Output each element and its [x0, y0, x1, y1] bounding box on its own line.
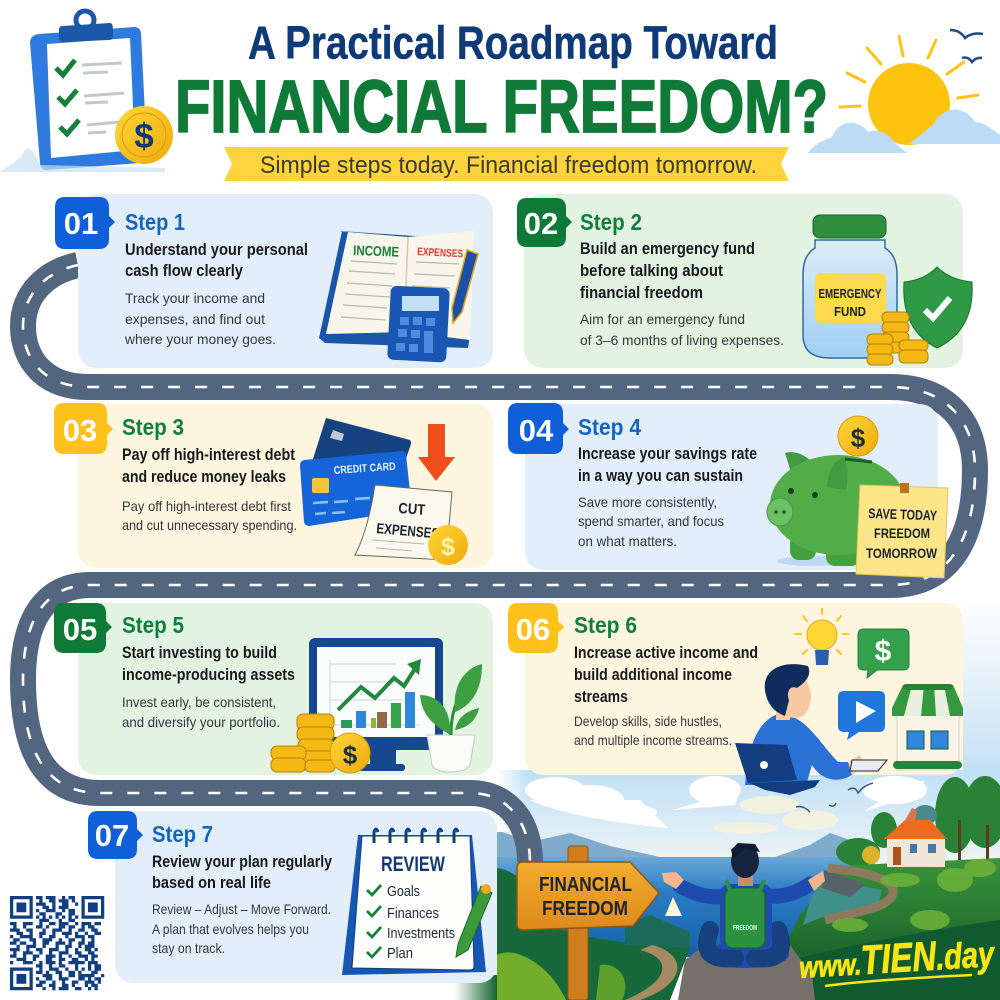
step 2 text	[580, 209, 784, 348]
icon: storefront	[891, 684, 963, 770]
winding road	[23, 265, 975, 862]
badge 04: 04	[519, 413, 554, 448]
icon: green piggy bank: $	[851, 423, 866, 453]
badge 03: 03	[63, 413, 97, 448]
step 2 text: Aim for an emergency fund	[580, 311, 745, 327]
step 5 text: Start investing to build	[122, 644, 277, 662]
step 4 text: in a way you can sustain	[578, 467, 743, 485]
step 1 text: cash flow clearly	[125, 262, 244, 280]
title	[175, 16, 828, 148]
person on rock with backpack: FREEDOM	[733, 923, 757, 932]
icon: credit cards: CREDIT CARD	[333, 461, 396, 477]
icon: plant in pot	[420, 664, 482, 772]
panel: step 2	[517, 194, 972, 368]
step 3 text: and reduce money leaks	[122, 468, 286, 486]
icon: green dollar speech bubble	[858, 629, 909, 678]
icon: ledger, calculator and pen: INCOME	[353, 242, 399, 260]
icon: review notepad: REVIEW	[381, 853, 445, 876]
step 3 text: Pay off high-interest debt	[122, 446, 295, 464]
panel: step 5	[54, 603, 493, 775]
icon: sticky note: TOMORROW	[866, 545, 938, 561]
icon: sun, clouds and birds	[808, 30, 1000, 153]
icon: sticky note	[856, 483, 948, 578]
badge 05	[54, 603, 112, 653]
sea	[497, 857, 867, 957]
step 4 text: Save more consistently,	[578, 494, 717, 510]
badge 01	[55, 197, 115, 249]
step 5 text: Invest early, be consistent,	[122, 694, 276, 710]
icon: emergency fund jar	[803, 215, 897, 358]
step 1 text: Step 1	[125, 209, 185, 235]
panel: step 1	[55, 194, 493, 368]
title: A Practical Roadmap Toward	[248, 16, 778, 68]
icon: coin stacks	[867, 312, 928, 365]
step 1 text: Understand your personal	[125, 241, 308, 259]
clouds in sky	[525, 776, 927, 828]
icon: cut expenses note and coin: CUT	[398, 500, 426, 519]
step 6 text: Increase active income and	[574, 644, 758, 662]
QR code	[10, 898, 104, 989]
icon: blue video speech bubble	[838, 691, 885, 740]
step 4 text: Step 4	[578, 414, 641, 440]
step 4 text: spend smarter, and focus	[578, 513, 724, 529]
icon: emergency fund jar: FUND	[834, 305, 866, 319]
icon: monitor with growth chart	[309, 638, 443, 771]
icon: review notepad	[342, 829, 492, 975]
step 3 text	[122, 414, 297, 533]
icon: ledger, calculator and pen: EXPENSES	[417, 246, 463, 260]
sailboat	[665, 897, 682, 916]
step 1 text: expenses, and find out	[125, 311, 265, 327]
step 6 text	[574, 612, 758, 748]
icon: person working on laptop	[735, 664, 887, 795]
step 2 text: of 3–6 months of living expenses.	[580, 332, 784, 348]
step 3 text: Pay off high-interest debt first	[122, 498, 291, 514]
icon: red down arrow	[418, 424, 455, 481]
badge 06	[508, 603, 564, 653]
icon: review notepad: Finances	[387, 906, 439, 922]
badge 02	[517, 198, 572, 247]
icon: green piggy bank	[767, 416, 906, 566]
step 1 text: Track your income and	[125, 290, 265, 306]
step 1 text: where your money goes.	[124, 331, 276, 347]
icon: review notepad: Investments	[387, 926, 455, 942]
icon: coin stacks with dollar coin	[271, 714, 370, 773]
icon: sticky note: SAVE TODAY	[868, 505, 938, 523]
yellow flowers	[862, 846, 880, 864]
step 2 text: financial freedom	[580, 284, 703, 302]
step 4 text	[578, 414, 757, 549]
signpost: financial freedom: FINANCIAL	[539, 874, 632, 896]
step 6 text: build additional income	[574, 666, 732, 684]
step 7 text: A plan that evolves helps you	[152, 921, 309, 937]
panel: step 3	[54, 403, 493, 568]
step 6 text: streams	[574, 688, 628, 706]
step 7 text: based on real life	[152, 874, 271, 892]
badge 03	[54, 403, 113, 454]
panel: step 7	[88, 811, 497, 983]
step 7 text: Step 7	[152, 821, 213, 847]
winding path	[825, 868, 893, 920]
background landscape scene	[455, 600, 1000, 1000]
panel: step 4	[508, 403, 948, 578]
water inlet	[803, 878, 882, 925]
step 6 text: Develop skills, side hustles,	[574, 713, 722, 729]
step 1 text	[124, 209, 308, 347]
icon: emergency fund jar: EMERGENCY	[818, 287, 882, 301]
icon: cut expenses note and coin	[355, 485, 468, 565]
step 3 text: Step 3	[122, 414, 184, 440]
mountains	[497, 830, 875, 870]
step 6 text: and multiple income streams.	[574, 732, 732, 748]
icon: credit cards	[300, 418, 412, 526]
step 4 text: on what matters.	[578, 533, 677, 549]
icon: cut expenses note and coin: EXPENSES	[376, 521, 440, 542]
icon: green dollar speech bubble: $	[875, 635, 892, 668]
cliff	[822, 870, 866, 897]
icon: green shield	[904, 267, 972, 348]
icon: review notepad: Plan	[387, 946, 413, 962]
icon: coin stacks with dollar coin: $	[343, 740, 358, 770]
person on rock with backpack	[662, 843, 825, 968]
badge 06: 06	[516, 612, 550, 647]
dark lower hill	[775, 920, 1000, 1000]
icon: clipboard with checklist and coin	[0, 11, 173, 172]
rock	[678, 945, 815, 1000]
cottage	[884, 808, 947, 867]
icon: light bulb	[795, 609, 848, 665]
badge 02: 02	[524, 206, 558, 241]
step 5 text: Step 5	[122, 612, 184, 638]
step 4 text: Increase your savings rate	[578, 445, 757, 463]
icon: sticky note: FREEDOM	[874, 525, 930, 541]
icon: review notepad: Goals	[387, 884, 420, 900]
signpost: financial freedom: FREEDOM	[542, 898, 628, 920]
step 7 text: stay on track.	[152, 940, 225, 956]
step 5 text: income-producing assets	[122, 666, 295, 684]
badge 07: 07	[95, 818, 129, 853]
step 7 text: Review your plan regularly	[152, 853, 333, 871]
step 5 text: and diversify your portfolio.	[122, 714, 280, 730]
step 2 text: Build an emergency fund	[580, 240, 755, 258]
step 3 text: and cut unnecessary spending.	[122, 517, 297, 533]
panel: step 6	[508, 603, 963, 795]
signpost: financial freedom	[517, 846, 659, 1000]
step 2 text: Step 2	[580, 209, 642, 235]
step 6 text: Step 6	[574, 612, 637, 638]
icon: clipboard with checklist and coin: $	[134, 117, 154, 156]
step 2 text: before talking about	[580, 262, 723, 280]
icon: ledger, calculator and pen	[319, 231, 478, 363]
icon: cut expenses note and coin: $	[441, 533, 455, 561]
badge 04	[508, 403, 569, 454]
badge 05: 05	[63, 612, 97, 647]
bright leaves on hill	[832, 859, 996, 932]
subtitle banner: Simple steps today. Financial freedom tomorrow.	[260, 152, 757, 179]
title: FINANCIAL FREEDOM?	[175, 65, 828, 148]
fade left	[497, 770, 527, 832]
step 7 text: Review – Adjust – Move Forward.	[152, 901, 331, 917]
step 5 text	[122, 612, 295, 730]
badge 07	[88, 811, 143, 859]
left foreground foliage	[497, 868, 690, 1000]
badge 01: 01	[64, 206, 98, 241]
right hillside	[755, 858, 1000, 1000]
trees	[836, 776, 1000, 866]
birds	[796, 783, 873, 812]
step 7 text	[152, 821, 333, 956]
